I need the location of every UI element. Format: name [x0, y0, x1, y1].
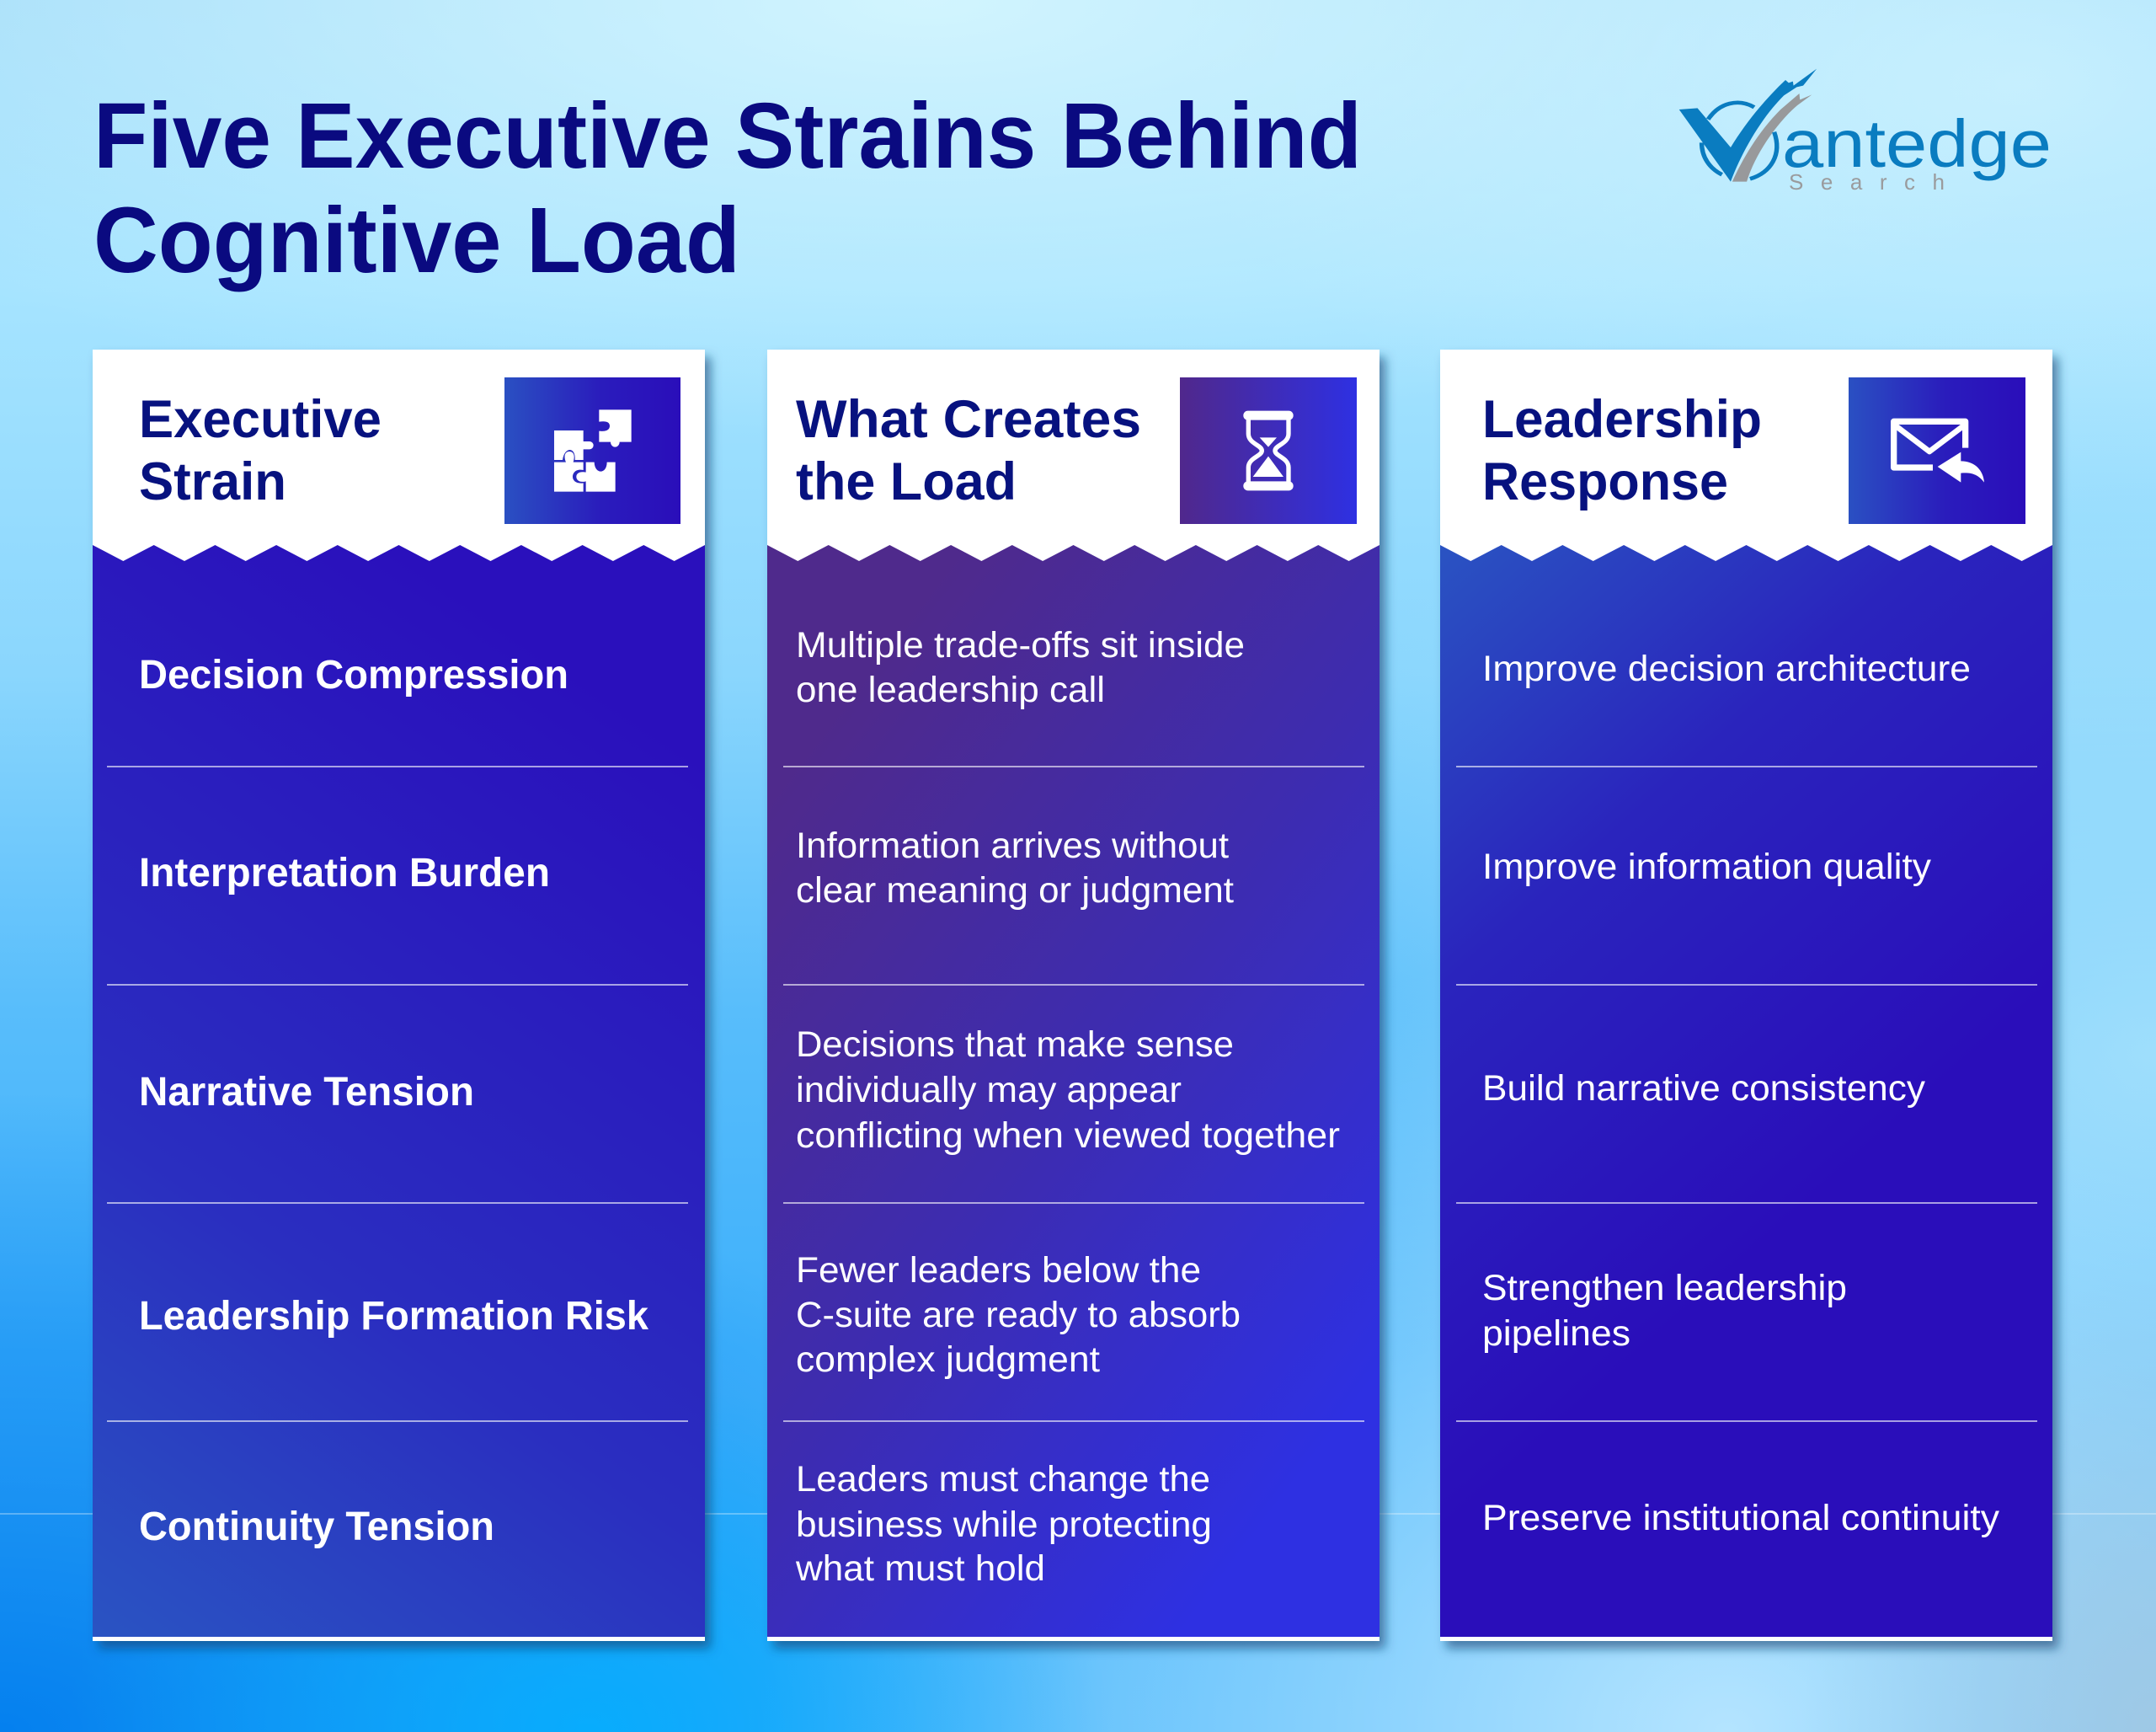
title: Cognitive Load — [93, 189, 740, 292]
title — [93, 84, 1362, 292]
row labels: Continuity Tension — [139, 1505, 494, 1549]
row actions: Build narrative consistency — [1482, 1068, 1926, 1109]
heading: Leadership Response: Leadership — [1482, 390, 1762, 449]
icon: hourglass — [1180, 377, 1357, 524]
row labels — [139, 653, 648, 1549]
row descriptions: complex judgment — [796, 1339, 1100, 1380]
row descriptions: business while protecting — [796, 1505, 1212, 1545]
icon: puzzle — [504, 377, 680, 524]
row descriptions: Information arrives without — [796, 826, 1229, 866]
row actions: Improve information quality — [1482, 847, 1932, 887]
row labels: Narrative Tension — [139, 1070, 474, 1115]
row descriptions: Multiple trade-offs sit inside — [796, 625, 1245, 666]
logo: Vantedge Search: Search — [1789, 169, 1945, 195]
row actions — [1482, 649, 2000, 1538]
heading: Leadership Response — [1482, 390, 1762, 511]
row descriptions: clear meaning or judgment — [796, 870, 1234, 911]
row actions: Strengthen leadership — [1482, 1268, 1847, 1308]
row descriptions: what must hold — [795, 1548, 1045, 1589]
row descriptions: Decisions that make sense — [796, 1024, 1234, 1065]
row descriptions: conflicting when viewed together — [796, 1115, 1340, 1156]
heading: What Creates the Load: the Load — [796, 452, 1017, 511]
logo: Vantedge Search — [1679, 69, 2052, 195]
row descriptions — [795, 625, 1340, 1589]
row descriptions: Fewer leaders below the — [796, 1250, 1201, 1291]
heading: Executive Strain — [139, 390, 382, 511]
row labels: Decision Compression — [139, 653, 568, 698]
row descriptions: Leaders must change the — [796, 1459, 1210, 1499]
panel: Executive Strain — [93, 350, 705, 1641]
row descriptions: C-suite are ready to absorb — [796, 1295, 1241, 1335]
heading: What Creates the Load — [796, 390, 1141, 511]
row descriptions: one leadership call — [796, 670, 1105, 710]
panel: What Creates the Load — [767, 350, 1380, 1641]
row actions: Preserve institutional continuity — [1482, 1498, 2000, 1538]
title: Five Executive Strains Behind — [93, 84, 1362, 188]
heading: What Creates the Load: What Creates — [796, 390, 1141, 449]
row actions: Improve decision architecture — [1482, 649, 1971, 689]
logo: Vantedge Search: antedge — [1782, 106, 2052, 181]
row descriptions: individually may appear — [796, 1070, 1182, 1110]
row actions: pipelines — [1482, 1313, 1630, 1354]
panel: Leadership Response — [1440, 350, 2052, 1641]
row labels: Leadership Formation Risk — [139, 1294, 648, 1339]
icon: envelope reply — [1849, 377, 2025, 524]
heading: Executive Strain: Strain — [139, 452, 286, 511]
heading: Leadership Response: Response — [1482, 452, 1728, 511]
row labels: Interpretation Burden — [139, 851, 550, 895]
heading: Executive Strain: Executive — [139, 390, 382, 449]
